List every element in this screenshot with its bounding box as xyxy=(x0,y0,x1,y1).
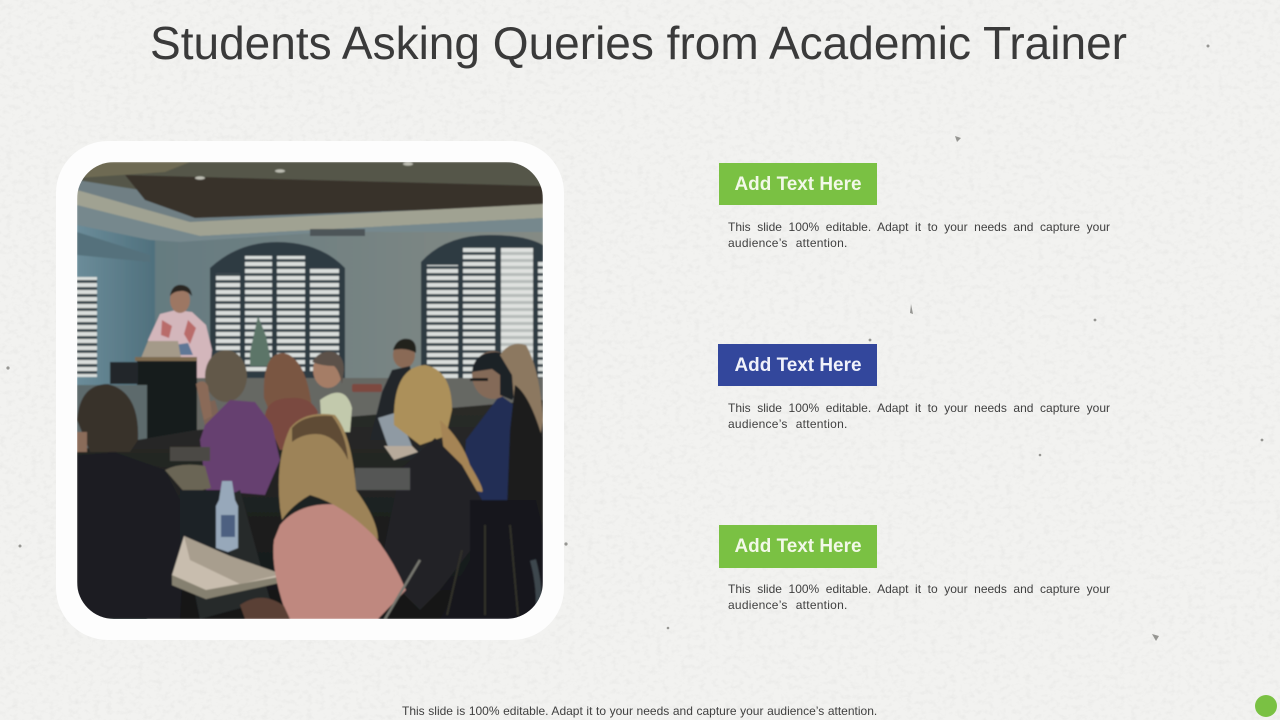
heading box 3: Add Text Here xyxy=(734,536,862,557)
woman pink top xyxy=(273,504,406,619)
left wall xyxy=(77,225,155,386)
window 2 xyxy=(421,235,543,385)
ceiling xyxy=(82,162,541,190)
heading box 2: Add Text Here xyxy=(734,355,862,376)
heading box 1: Add Text Here xyxy=(734,174,862,195)
desk line and dark floor xyxy=(77,385,147,625)
back wall xyxy=(156,232,543,376)
panel: photo with white rounded frame xyxy=(56,141,564,640)
photo: classroom scene xyxy=(77,162,543,625)
hand and bracelet xyxy=(240,598,290,619)
body text 2: This slide 100% editable. Adapt it to your needs and capture your audience’s attention. xyxy=(728,401,1110,431)
icon: green corner dot xyxy=(1255,695,1277,717)
footer note: This slide is 100% editable. Adapt it to your needs and capture your audience’s attention. xyxy=(402,704,877,718)
window 1 xyxy=(210,242,345,378)
heading box 3 xyxy=(719,525,877,568)
person lower left xyxy=(77,384,138,452)
podium xyxy=(136,360,198,440)
speaker xyxy=(148,310,212,385)
table xyxy=(195,490,270,619)
photo frame xyxy=(56,141,564,640)
man striped shirt xyxy=(320,393,352,432)
left wall window xyxy=(77,277,97,377)
man in background xyxy=(392,348,416,368)
heading box 2 xyxy=(718,344,877,386)
water bottle xyxy=(216,481,238,552)
open book xyxy=(172,536,284,599)
title: Students Asking Queries from Academic Trainer xyxy=(150,17,1127,69)
body text 3: This slide 100% editable. Adapt it to your needs and capture your audience’s attention. xyxy=(728,582,1110,612)
heading box 1 xyxy=(719,163,877,205)
man navy shirt xyxy=(464,396,514,501)
woman with ponytail xyxy=(394,365,452,445)
man purple shirt xyxy=(205,350,247,402)
laptop xyxy=(141,341,181,358)
blonde behind right xyxy=(499,343,543,434)
laptop right xyxy=(377,412,413,447)
chairs and floor highlights xyxy=(470,500,508,550)
woman red xyxy=(264,353,312,408)
body text 1: This slide 100% editable. Adapt it to your needs and capture your audience’s attention. xyxy=(728,220,1110,250)
